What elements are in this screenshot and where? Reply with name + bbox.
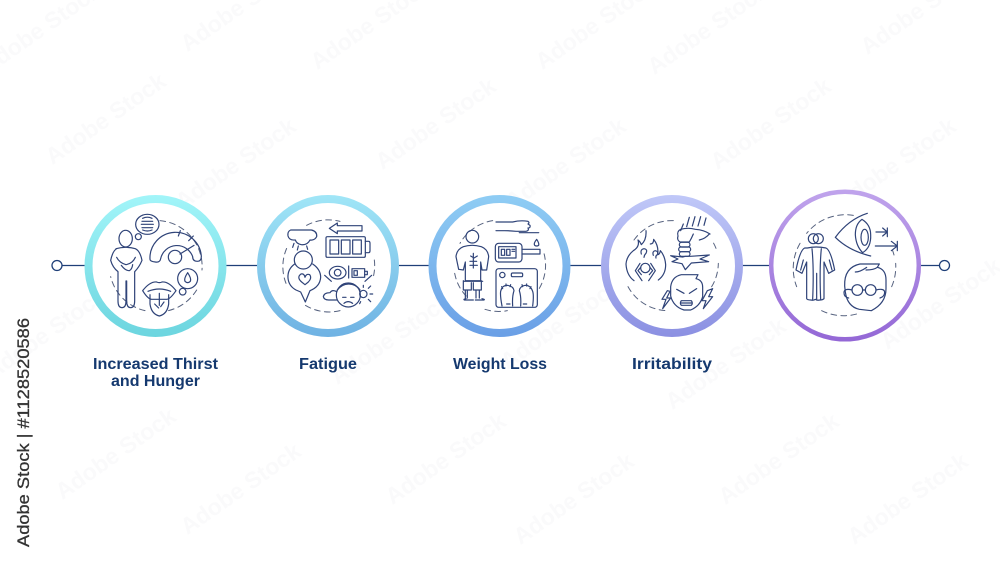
panel: weight loss bbox=[432, 199, 566, 373]
panel: fatigue bbox=[261, 199, 395, 373]
panel: irritability bbox=[605, 199, 739, 373]
watermark pattern: Adobe Stock bbox=[705, 72, 836, 174]
ring 4 bbox=[605, 199, 739, 333]
panel: increased thirst and hunger bbox=[88, 199, 222, 390]
watermark pattern: Adobe Stock bbox=[170, 112, 301, 214]
icon: weight loss bbox=[455, 221, 546, 311]
label: fatigue: Fatigue bbox=[299, 356, 357, 373]
watermark pattern: Adobe Stock bbox=[508, 447, 639, 549]
icon: fatigue bbox=[283, 220, 375, 312]
label: irritability: Irritability bbox=[632, 356, 712, 373]
icon: thirst and hunger bbox=[111, 214, 202, 316]
ring 2 bbox=[261, 199, 395, 333]
watermark pattern: Adobe Stock bbox=[713, 407, 844, 509]
label: increased thirst and hunger bbox=[93, 356, 218, 390]
ring 5 bbox=[771, 192, 919, 339]
timeline connector bbox=[52, 260, 950, 270]
label: increased thirst and hunger: Increased Thirst bbox=[93, 356, 218, 373]
watermark pattern: Adobe Stock bbox=[660, 312, 791, 414]
ring 3 bbox=[432, 199, 566, 333]
label: weight loss: Weight Loss bbox=[453, 356, 547, 373]
ring 1 bbox=[88, 199, 222, 333]
watermark pattern: Adobe Stock bbox=[50, 402, 181, 504]
watermark pattern: Adobe Stock bbox=[380, 407, 511, 509]
icon: blurred vision bbox=[793, 213, 897, 316]
panel: blurred vision bbox=[771, 192, 919, 339]
icon: irritability bbox=[626, 217, 718, 311]
watermark pattern: Adobe Stock bbox=[495, 272, 626, 374]
stock credit: Adobe Stock | #1128520586 bbox=[14, 318, 33, 547]
watermark pattern: Adobe Stock bbox=[175, 437, 306, 539]
watermark pattern: Adobe Stock bbox=[370, 72, 501, 174]
watermark pattern: Adobe Stock bbox=[830, 112, 961, 214]
watermark pattern: Adobe Stock bbox=[500, 112, 631, 214]
watermark pattern: Adobe Stock bbox=[842, 447, 973, 549]
watermark pattern: Adobe Stock bbox=[325, 287, 456, 389]
label: increased thirst and hunger: and Hunger bbox=[111, 373, 200, 390]
watermark pattern: Adobe Stock bbox=[40, 67, 171, 169]
